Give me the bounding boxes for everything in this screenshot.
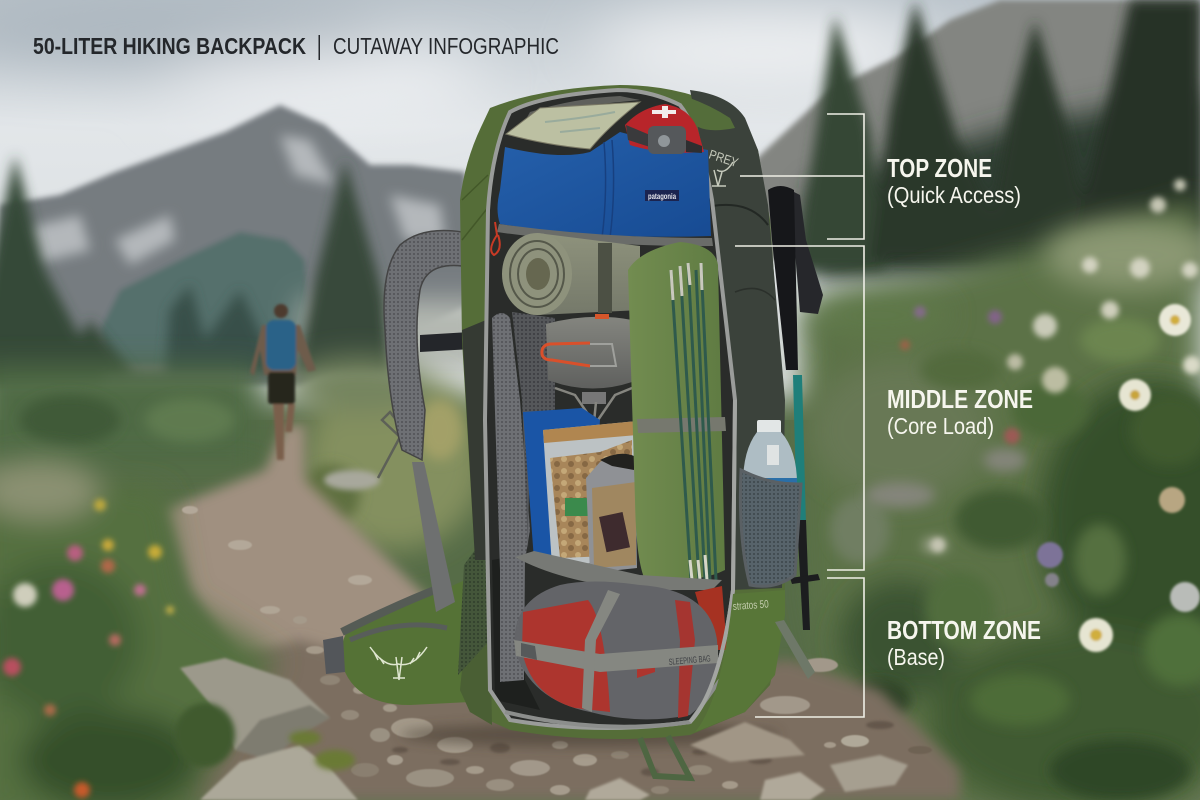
lower back panel bbox=[492, 555, 540, 710]
label: middle zone: MIDDLE ZONE bbox=[887, 384, 1033, 414]
tent stuff sack bbox=[628, 242, 725, 581]
blue jacket bbox=[498, 132, 711, 238]
label: middle zone: (Core Load) bbox=[887, 413, 994, 439]
tent strap bbox=[637, 417, 726, 433]
label: patagonia: patagonia bbox=[648, 192, 676, 201]
far tree band right bbox=[810, 90, 1200, 280]
hip side mesh pocket bbox=[458, 535, 490, 675]
sleeping bag bbox=[514, 582, 727, 719]
lower right green panel bbox=[695, 590, 785, 732]
headlamp bbox=[626, 125, 702, 154]
shelf divider bbox=[515, 551, 722, 590]
map detail bbox=[545, 112, 615, 132]
left side panel seams bbox=[462, 175, 490, 240]
back panel mesh bbox=[492, 313, 530, 570]
map bbox=[506, 102, 640, 149]
clear food pouch bbox=[543, 421, 637, 566]
ground dark gaps bbox=[392, 721, 894, 776]
wildflowers left bbox=[3, 499, 174, 798]
left bush mottling bbox=[20, 395, 462, 525]
middle zone bracket bbox=[735, 246, 864, 570]
first aid cross bbox=[652, 106, 676, 118]
sternum strap bbox=[420, 332, 472, 352]
distant mountain right bbox=[755, 0, 1200, 260]
clouds bbox=[0, 0, 930, 115]
shoulder strap bbox=[384, 231, 462, 460]
upper green accent bbox=[640, 87, 735, 130]
trekking pole bbox=[768, 186, 823, 630]
blue food pouch bbox=[523, 408, 600, 560]
zipper frame bbox=[485, 90, 735, 728]
meadow right foliage patches bbox=[830, 318, 1200, 800]
lower back mesh bbox=[500, 555, 525, 682]
inner mesh bbox=[512, 312, 555, 550]
illustration: hiking backpack cutaway bbox=[323, 85, 823, 778]
label: patagonia bbox=[645, 190, 679, 201]
meadow right mottling bbox=[810, 220, 1200, 800]
mesh side pocket bbox=[740, 470, 801, 586]
trail bbox=[165, 425, 470, 690]
title bbox=[33, 33, 559, 60]
lid seam bbox=[712, 205, 768, 225]
conifer trees right bbox=[795, 0, 1200, 270]
meadow base bbox=[0, 400, 1200, 800]
title: CUTAWAY INFOGRAPHIC bbox=[333, 33, 559, 59]
ground pebbles bbox=[182, 506, 932, 795]
sky bbox=[0, 0, 1200, 420]
red zipper pull bbox=[491, 222, 500, 255]
meadow left foreground bbox=[0, 460, 280, 800]
lower left dark base bbox=[460, 620, 492, 725]
hiker in distance bbox=[250, 304, 316, 460]
bottom grab loop bbox=[640, 736, 690, 778]
wildflowers right bbox=[1037, 304, 1200, 652]
label: bottom zone bbox=[887, 615, 1041, 670]
title: 50-LITER HIKING BACKPACK bbox=[33, 33, 306, 59]
mountain snow patches bbox=[20, 135, 445, 265]
left dark edge bbox=[462, 320, 488, 560]
foreground rocks bbox=[180, 658, 908, 800]
hip belt bbox=[323, 580, 470, 705]
compression strap right bbox=[775, 620, 815, 679]
small snack bag bbox=[586, 454, 637, 573]
sleeping mat roll bbox=[502, 233, 640, 315]
label: top zone bbox=[887, 153, 1021, 208]
top zone bracket bbox=[740, 114, 864, 239]
compression strap lower left bbox=[412, 462, 455, 612]
label: top zone: (Quick Access) bbox=[887, 182, 1021, 208]
small distant flowers right bbox=[900, 179, 1200, 552]
OSPREY logo text on lid: PREY bbox=[707, 147, 741, 170]
rocky ground bbox=[150, 640, 960, 800]
valley haze bbox=[300, 300, 490, 370]
front bottom lip bbox=[505, 680, 720, 727]
trail rock bbox=[324, 470, 380, 490]
label: top zone: TOP ZONE bbox=[887, 153, 992, 183]
label: middle zone bbox=[887, 384, 1033, 439]
middle shelf band bbox=[497, 224, 713, 246]
label: bottom zone: (Base) bbox=[887, 644, 945, 670]
camp stove bbox=[555, 388, 632, 422]
text: stratos 50: stratos 50 bbox=[732, 599, 769, 613]
pack ground shadow bbox=[400, 723, 780, 747]
grass tufts bbox=[175, 703, 355, 770]
pocket seam bbox=[735, 288, 775, 300]
distant mountains left bbox=[0, 105, 480, 385]
conifer trees left bbox=[0, 155, 392, 390]
bottom zone bracket bbox=[755, 578, 864, 717]
meadow right base bbox=[800, 200, 1200, 800]
right dark side panel bbox=[690, 90, 785, 590]
icon: osprey logo on lid bbox=[712, 162, 733, 186]
icon: osprey logo on hip belt bbox=[370, 647, 427, 680]
right zipper overlay bbox=[690, 400, 735, 722]
first aid kit bbox=[625, 104, 704, 153]
meadow left bushes bbox=[0, 357, 485, 550]
sleeping bag: SLEEPING BAG bbox=[668, 653, 711, 667]
label: bottom zone: BOTTOM ZONE bbox=[887, 615, 1041, 645]
pack body green bbox=[460, 85, 785, 739]
tent poles bbox=[671, 263, 716, 580]
blurred rocks right bbox=[865, 448, 1027, 551]
cord loop on strap bbox=[378, 412, 408, 478]
lid lining bbox=[520, 96, 640, 130]
water bottle bbox=[743, 420, 797, 486]
interior cavity bbox=[485, 90, 735, 728]
cook pot bbox=[542, 314, 632, 389]
zone brackets and pointer lines bbox=[735, 114, 864, 717]
